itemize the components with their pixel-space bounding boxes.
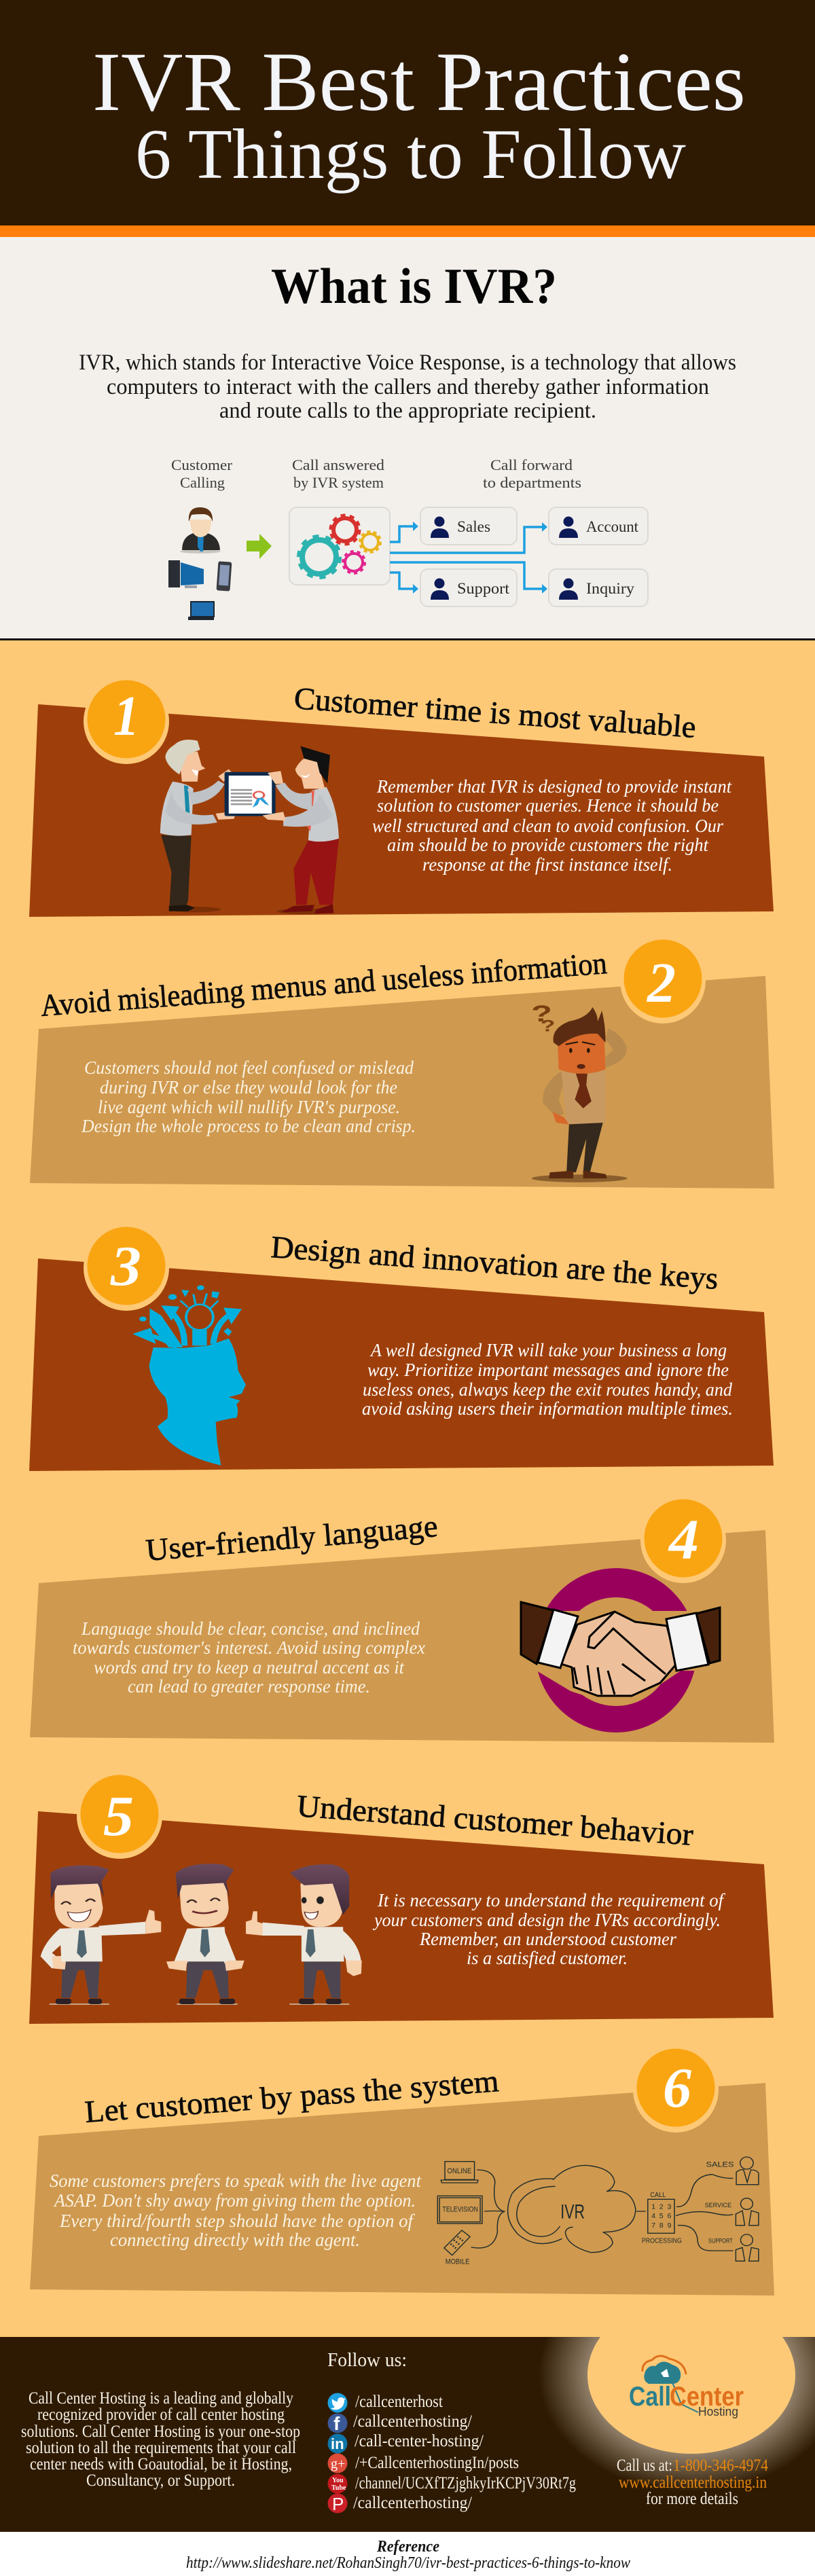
heading: step 4: User-friendly language — [145, 1508, 439, 1567]
number badge 4 — [640, 1498, 726, 1583]
icon: pink gear — [343, 551, 365, 573]
question marks — [531, 1001, 555, 1035]
reference url: http://www.slideshare.net/RohanSingh70/ivr-best-practices-6-things-to-know — [186, 2554, 630, 2572]
linkedin — [327, 2432, 484, 2453]
text block: step 1: aim should be to provide customers the right — [387, 835, 709, 855]
contact details: 1-800-346-4974 — [673, 2456, 768, 2475]
reference heading: Reference — [376, 2538, 439, 2556]
sketch: support agent: SUPPORT — [708, 2238, 733, 2245]
text block: step 5: your customers and design the IVRs accordingly. — [372, 1910, 721, 1930]
number badge 1 — [84, 678, 169, 764]
box: account: Account — [586, 518, 639, 535]
sketch: mobile: MOBILE — [446, 2258, 469, 2266]
heading: step 2: Avoid misleading menus and useless information — [39, 945, 608, 1023]
sketch: input lines — [471, 2170, 505, 2248]
illustration: two men holding certificate — [160, 740, 339, 914]
facebook: /callcenterhosting/ — [353, 2412, 472, 2431]
label: call forward — [483, 456, 581, 491]
label: call forward: to departments — [483, 474, 581, 491]
contact details: Call us at: — [617, 2456, 672, 2475]
facebook: f — [333, 2413, 340, 2434]
text block: step 3: way. Prioritize important messages and ignore the — [367, 1360, 729, 1380]
icon: desktop computer — [168, 560, 204, 588]
sketch: online — [441, 2162, 478, 2183]
sketch: sales agent: SALES — [706, 2161, 734, 2169]
logo subtitle: Hosting — [698, 2405, 738, 2418]
number badge 3 — [84, 1225, 169, 1311]
icon: teal gear — [299, 537, 340, 577]
number badge 2: 2 — [646, 951, 676, 1015]
man 1 thumbs up — [41, 1866, 161, 2004]
diagram: IVR sketch — [437, 2157, 759, 2266]
text block: step 4: can lead to greater response time. — [128, 1676, 370, 1697]
text block: step 2: during IVR or else they would look for the — [100, 1077, 397, 1097]
text block: step 1: Remember that IVR is designed to provide instant — [376, 776, 732, 797]
sketch: television: TELEVISION — [442, 2206, 478, 2214]
google plus: /+CallcenterhostingIn/posts — [355, 2454, 519, 2472]
linkedin: in — [331, 2435, 344, 2452]
text block: about: Consultancy, or Support. — [86, 2471, 235, 2490]
heading: what is IVR: What is IVR? — [271, 259, 557, 314]
illustration: three businessmen — [41, 1864, 362, 2004]
logo wordmark: Center — [670, 2382, 744, 2412]
text block: step 4 — [73, 1618, 425, 1697]
box: account — [549, 507, 648, 545]
twitter: /callcenterhost — [355, 2393, 443, 2411]
sketch: service agent — [705, 2198, 759, 2226]
number badge 5 — [77, 1773, 162, 1859]
contact details — [617, 2456, 768, 2508]
diagram: call flow — [168, 456, 648, 620]
icon: head with ideas — [132, 1285, 246, 1466]
box: IVR system gears — [289, 507, 390, 585]
box: inquiry: Inquiry — [586, 580, 635, 597]
text block: step 2: live agent which will nullify IVR's purpose. — [98, 1097, 400, 1117]
sketch: call processing keypad: 7 8 9 — [651, 2222, 672, 2230]
social links — [327, 2393, 576, 2514]
youtube: Tube — [331, 2484, 346, 2492]
icon: red gear — [331, 515, 359, 544]
title: 6 Things to Follow — [135, 114, 686, 194]
label: customer calling: Calling — [180, 474, 225, 491]
sketch: call processing keypad: CALL — [650, 2192, 666, 2199]
question marks: ? — [541, 1017, 555, 1035]
text block: about: recognized provider of call center hosting — [37, 2406, 285, 2424]
number badge 1: 1 — [113, 685, 139, 748]
label: call answered — [292, 456, 384, 491]
text block: IVR definition — [79, 350, 736, 423]
text block: step 4: towards customer's interest. Avoid using complex — [73, 1637, 425, 1658]
text block: step 6: connecting directly with the agent. — [110, 2230, 360, 2250]
illustration: confused man — [531, 1001, 628, 1182]
text block: step 3 — [362, 1340, 733, 1419]
text block: step 5: Remember, an understood customer — [419, 1929, 676, 1949]
arrow: green — [247, 534, 272, 559]
sketch: sales agent — [706, 2157, 759, 2185]
panel: step 4 — [30, 1498, 774, 1743]
youtube: You — [332, 2477, 344, 2484]
text block: step 5 — [372, 1890, 725, 1968]
panel: step 3 — [29, 1225, 774, 1471]
sketch: service agent: SERVICE — [705, 2202, 731, 2209]
text block: step 6 — [50, 2171, 422, 2250]
sketch: call processing keypad: PROCESSING — [642, 2238, 682, 2245]
panel: step 6 — [30, 2047, 774, 2296]
label: call forward: Call forward — [490, 456, 573, 473]
panel: step 1 — [29, 678, 774, 917]
panel: step 2 — [30, 938, 774, 1189]
logo wordmark: Call — [629, 2382, 671, 2412]
sketch: call processing keypad: 4 5 6 — [651, 2213, 672, 2220]
panel: what is IVR — [0, 237, 815, 640]
text block: about: Call Center Hosting is a leading and globally — [29, 2389, 293, 2408]
box: sales: Sales — [457, 518, 490, 535]
box: support: Support — [457, 580, 510, 597]
text block: IVR definition: and route calls to the appropriate recipient. — [219, 399, 596, 423]
illustration: handshake — [521, 1568, 720, 1733]
label: call answered: Call answered — [292, 456, 384, 473]
sketch: support agent — [708, 2234, 759, 2261]
text block: about: solutions. Call Center Hosting is your one-stop — [21, 2423, 300, 2441]
man 2 smiling — [166, 1864, 244, 2004]
sketch: IVR cloud: IVR — [560, 2201, 585, 2223]
contact details: www.callcenterhosting.in — [619, 2473, 767, 2492]
youtube — [327, 2473, 576, 2494]
icon: customer — [180, 507, 221, 554]
text block: step 5: It is necessary to understand the requirement of — [377, 1890, 725, 1910]
text block: step 1: well structured and clean to avoid confusion. Our — [372, 816, 723, 836]
reference section — [0, 2532, 815, 2576]
text block: about: center needs with Goautodial, be it Hosting, — [30, 2455, 292, 2473]
youtube: /channel/UCXfTZjghkyIrKCPjV30Rt7g — [355, 2474, 576, 2492]
facebook — [327, 2412, 472, 2434]
logo wordmark — [629, 2382, 744, 2412]
text block: step 6: Some customers prefers to speak with the live agent — [50, 2171, 422, 2191]
label: customer calling — [171, 456, 233, 491]
question marks: ? — [531, 1001, 552, 1027]
contact details: for more details — [646, 2490, 738, 2508]
icon: smartphone — [216, 561, 232, 592]
pinterest: /callcenterhosting/ — [353, 2494, 472, 2512]
text block: IVR definition: IVR, which stands for Interactive Voice Response, is a technology that allows — [79, 350, 736, 375]
sketch: television — [437, 2196, 482, 2224]
arrows: routing to departments — [390, 522, 547, 594]
text block: step 6: Every third/fourth step should have the option of — [59, 2211, 415, 2231]
title: IVR Best Practices — [92, 35, 746, 128]
man 3 thumbs up — [246, 1864, 362, 2004]
number badge 5: 5 — [103, 1785, 134, 1848]
text block: step 1: response at the first instance itself. — [422, 854, 672, 875]
text block: step 5: is a satisfied customer. — [467, 1948, 628, 1968]
number badge 6: 6 — [663, 2056, 691, 2120]
logo: call center hosting — [629, 2356, 744, 2418]
heading: step 3: Design and innovation are the keys — [270, 1229, 719, 1296]
title — [92, 35, 746, 194]
icon: yellow gear — [360, 532, 380, 552]
text block: step 2 — [81, 1057, 416, 1136]
text block: IVR definition: computers to interact with the callers and thereby gather information — [107, 375, 709, 399]
heading: step 1: Customer time is most valuable — [293, 681, 697, 744]
pinterest: P — [332, 2494, 344, 2514]
heading: step 5: Understand customer behavior — [295, 1788, 694, 1852]
twitter — [327, 2393, 443, 2412]
label: call answered: by IVR system — [293, 474, 384, 491]
text block: step 2: Customers should not feel confused or mislead — [84, 1057, 414, 1078]
text block: step 1: solution to customer queries. Hence it should be — [377, 795, 719, 816]
sketch: output lines — [676, 2175, 733, 2251]
text block: step 2: Design the whole process to be clean and crisp. — [81, 1116, 416, 1136]
footer panel — [0, 2337, 815, 2532]
text block: about: solution to all the requirements that your call — [26, 2439, 296, 2457]
sketch: IVR cloud — [508, 2165, 636, 2253]
text block: step 6: ASAP. Don't shy away from giving them the option. — [53, 2190, 416, 2211]
icon: cloud — [642, 2356, 698, 2412]
label: customer calling: Customer — [171, 456, 233, 473]
linkedin: /call-center-hosting/ — [355, 2432, 484, 2450]
heading: step 6: Let customer by pass the system — [84, 2063, 500, 2129]
text block: step 4: words and try to keep a neutral accent as it — [94, 1657, 405, 1677]
sketch: mobile — [444, 2230, 470, 2266]
text block: about — [21, 2389, 300, 2490]
box: inquiry — [549, 569, 648, 606]
box: support — [420, 569, 517, 606]
heading: follow us: Follow us: — [327, 2350, 407, 2371]
google plus: g+ — [331, 2456, 345, 2471]
text block: step 4: Language should be clear, concise, and inclined — [81, 1618, 420, 1639]
box: sales — [420, 507, 517, 545]
number badge 2 — [620, 938, 706, 1023]
icon: laptop — [188, 602, 214, 620]
text block: step 1 — [372, 776, 732, 875]
number badge 4: 4 — [668, 1508, 699, 1572]
number badge 3: 3 — [110, 1235, 141, 1298]
sketch: online: ONLINE — [448, 2166, 471, 2175]
panel: step 5 — [29, 1773, 774, 2024]
number badge 6 — [633, 2047, 719, 2133]
text block: step 3: avoid asking users their information multiple times. — [362, 1398, 733, 1419]
text block: step 3: A well designed IVR will take your business a long — [369, 1340, 727, 1360]
sketch: call processing keypad — [637, 2192, 682, 2245]
logo glow and circle — [543, 2337, 815, 2488]
sketch: call processing keypad: 1 2 3 — [651, 2204, 672, 2211]
header banner — [0, 0, 815, 237]
text block: step 3: useless ones, always keep the exit routes handy, and — [363, 1379, 732, 1400]
